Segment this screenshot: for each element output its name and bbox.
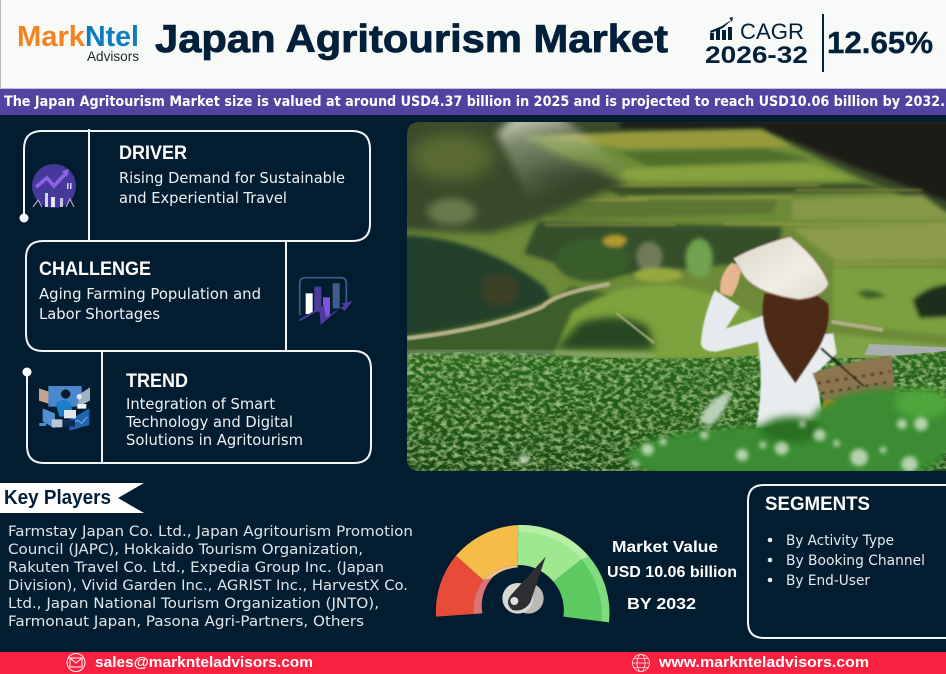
key players list: Farmonaut Japan, Pasona Agri-Partners, Others <box>8 614 364 630</box>
segments list: By Activity Type <box>786 533 894 549</box>
mid trees <box>555 235 713 282</box>
panel: driver, challenge, trend flow <box>20 129 371 463</box>
key players list: Ltd., Japan National Tourism Organization (JNTO), <box>8 596 379 612</box>
light green segment <box>518 525 589 582</box>
basket <box>813 348 894 415</box>
logo: MarkNtel Advisors: Ntel <box>85 21 139 53</box>
summary banner <box>0 88 946 115</box>
bright knoll <box>551 284 764 360</box>
challenge text: Labor Shortages <box>39 305 160 323</box>
valley floor and winding road <box>407 285 608 354</box>
sleeve and arm <box>701 290 773 352</box>
title: Japan Agritourism Market <box>155 18 668 61</box>
market value callout: Market Value <box>612 539 718 556</box>
website address: www.marknteladvisors.com <box>658 654 869 671</box>
trend text: Technology and Digital <box>125 413 293 431</box>
segments list: By Booking Channel <box>786 553 925 569</box>
left woodland <box>400 122 630 233</box>
hub <box>513 583 544 614</box>
sun beam <box>492 122 620 194</box>
woman <box>701 237 837 428</box>
icon: trend <box>39 386 90 431</box>
trend text <box>125 395 303 449</box>
photo: woman in conical hat overlooking tea fields <box>400 113 946 488</box>
market value callout <box>607 539 737 613</box>
yellow segment <box>456 525 518 580</box>
red segment <box>436 556 483 617</box>
email address: sales@marknteladvisors.com <box>95 654 313 671</box>
key players list: Division), Vivid Garden Inc., AGRIST Inc., HarvestX Co. <box>8 578 408 594</box>
terrace highlights <box>538 185 946 264</box>
CAGR value: 12.65% <box>827 25 933 60</box>
hat <box>734 237 828 299</box>
logo: MarkNtel Advisors: Mark <box>17 21 86 53</box>
key players list: Council (JAPC), Hokkaido Tourism Organization, <box>8 542 363 558</box>
icon: growth chart <box>710 17 733 40</box>
left hill <box>400 235 551 337</box>
key players tag: Key Players <box>4 487 111 509</box>
CAGR label: CAGR <box>740 19 804 44</box>
trend heading: TREND <box>126 370 188 392</box>
trend text: Integration of Smart <box>126 395 275 413</box>
icon: challenge <box>299 278 353 325</box>
fence <box>864 344 946 357</box>
header band <box>0 0 946 89</box>
challenge text <box>39 285 261 323</box>
foreground bokeh <box>518 417 928 472</box>
segments list <box>768 533 925 589</box>
connector outline <box>24 131 371 463</box>
CAGR period: 2026-32 <box>705 42 808 69</box>
key players list <box>8 524 413 630</box>
key players tag <box>0 483 144 513</box>
terraced hillside base <box>400 130 946 360</box>
distant dark forest <box>620 120 946 205</box>
challenge heading: CHALLENGE <box>39 258 151 280</box>
hair <box>763 293 829 383</box>
needle <box>508 557 546 610</box>
footer bar <box>0 652 946 674</box>
key players list: Farmstay Japan Co. Ltd., Japan Agritourism Promotion <box>8 524 413 540</box>
driver text: and Experiential Travel <box>119 189 287 207</box>
dark green segment <box>553 559 609 622</box>
foreground foliage <box>623 384 946 471</box>
icon: driver <box>32 164 76 208</box>
segments list: By End-User <box>786 573 870 589</box>
panel: segments <box>748 485 946 638</box>
logo: MarkNtel Advisors <box>17 21 139 64</box>
challenge text: Aging Farming Population and <box>39 285 261 303</box>
driver text <box>119 169 345 207</box>
gauge <box>436 525 610 622</box>
market value callout: USD 10.06 billion <box>607 564 737 581</box>
key players list: Rakuten Travel Co. Ltd., Expedia Group Inc. (Japan <box>8 560 384 576</box>
market value callout: BY 2032 <box>627 596 696 613</box>
driver text: Rising Demand for Sustainable <box>119 169 345 187</box>
logo: MarkNtel Advisors: Advisors <box>87 48 139 64</box>
icon: email <box>67 654 85 672</box>
icon: globe <box>632 654 650 672</box>
tea hedge <box>400 350 946 480</box>
dress <box>756 333 837 428</box>
trend text: Solutions in Agritourism <box>126 431 303 449</box>
driver heading: DRIVER <box>119 142 187 164</box>
segments heading: SEGMENTS <box>765 494 870 515</box>
